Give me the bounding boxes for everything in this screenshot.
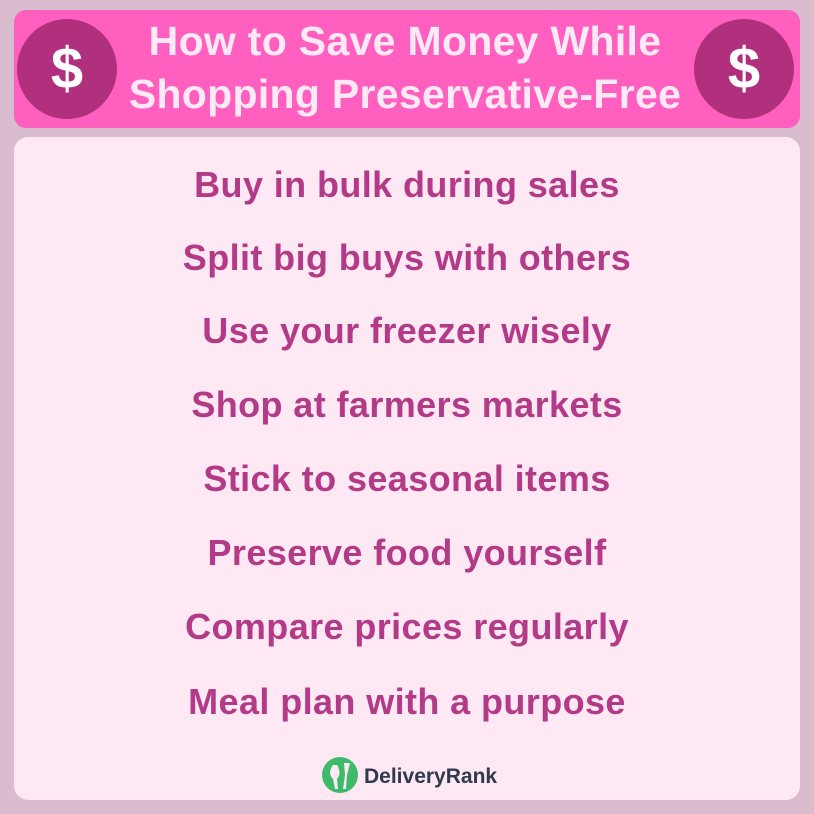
tip 6: Preserve food yourself (208, 532, 606, 573)
title: Shopping Preservative-Free (129, 71, 681, 117)
icon: dollar right (694, 19, 794, 119)
title: How to Save Money While (149, 18, 661, 64)
tip 1: Buy in bulk during sales (194, 164, 620, 205)
icon: dollar left: $ (51, 36, 83, 101)
logo: DeliveryRank: DeliveryRank (364, 765, 497, 788)
title (129, 18, 681, 117)
logo: DeliveryRank (322, 757, 497, 793)
panel: tips list (14, 137, 800, 800)
icon: dollar right: $ (728, 36, 760, 101)
tip 5: Stick to seasonal items (203, 458, 611, 499)
tip 4: Shop at farmers markets (191, 384, 623, 425)
header banner (14, 10, 800, 128)
icon: dollar left (17, 19, 117, 119)
tip 7: Compare prices regularly (185, 606, 629, 647)
tip 3: Use your freezer wisely (202, 310, 612, 351)
tip 8: Meal plan with a purpose (188, 681, 626, 722)
tip 2: Split big buys with others (183, 237, 631, 278)
